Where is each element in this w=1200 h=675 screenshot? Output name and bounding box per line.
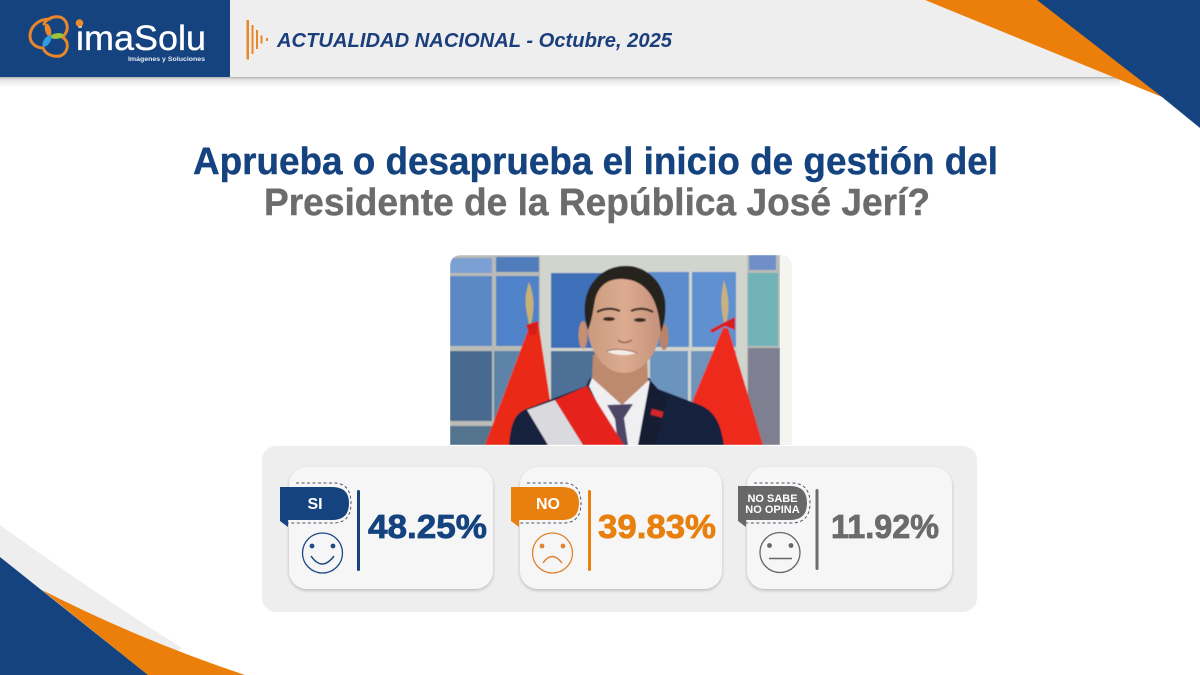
badge: no sabe no opina: NO SABE: [747, 493, 798, 505]
card: no sabe no opina: [738, 467, 952, 589]
suit: [509, 378, 724, 445]
logo: imaSolu: imaSolu: [76, 19, 206, 58]
neck and face: [592, 355, 648, 405]
bottom-left corner shapes: [0, 525, 245, 675]
header title: ACTUALIDAD NACIONAL - Octubre, 2025: [276, 30, 673, 52]
badge: no sabe no opina: [738, 483, 810, 527]
hair: [585, 266, 665, 332]
badge: SI: SI: [307, 496, 323, 513]
icon: neutral face: [760, 532, 800, 572]
results panel: [262, 446, 977, 612]
sash: [527, 400, 583, 445]
badge: NO: [511, 483, 581, 527]
window panes: [450, 255, 780, 445]
eyebrows, eyes, nose, mouth: [597, 309, 653, 355]
value: 39.83%: 39.83%: [598, 509, 716, 546]
top-right corner shapes: [925, 0, 1200, 128]
question heading: [193, 141, 998, 224]
flag left: [485, 321, 550, 445]
badge: SI: [280, 483, 351, 527]
value: 11.92%: 11.92%: [831, 508, 939, 545]
card: NO: [511, 467, 722, 589]
shirt: [589, 378, 651, 445]
icon: happy face: [302, 533, 342, 573]
flag right: [693, 328, 763, 445]
icon: audio wave: [246, 20, 268, 60]
badge: no sabe no opina: NO OPINA: [745, 504, 800, 516]
logo: imaSolu: [30, 17, 206, 63]
value: 48.25%: 48.25%: [368, 509, 487, 546]
card: SI: [280, 467, 493, 589]
badge: NO: NO: [536, 496, 560, 513]
lapel right: [638, 380, 668, 445]
question heading: Aprueba o desaprueba el inicio de gestión del: [193, 141, 998, 183]
question heading: Presidente de la República José Jerí?: [264, 182, 930, 224]
pin: [650, 409, 664, 418]
photo: president with flags: [450, 255, 792, 445]
tie: [607, 404, 633, 445]
logo: imaSolu: Imágenes y Soluciones: [128, 56, 205, 63]
icon: sad face: [532, 533, 572, 573]
header bar: [0, 0, 1200, 87]
